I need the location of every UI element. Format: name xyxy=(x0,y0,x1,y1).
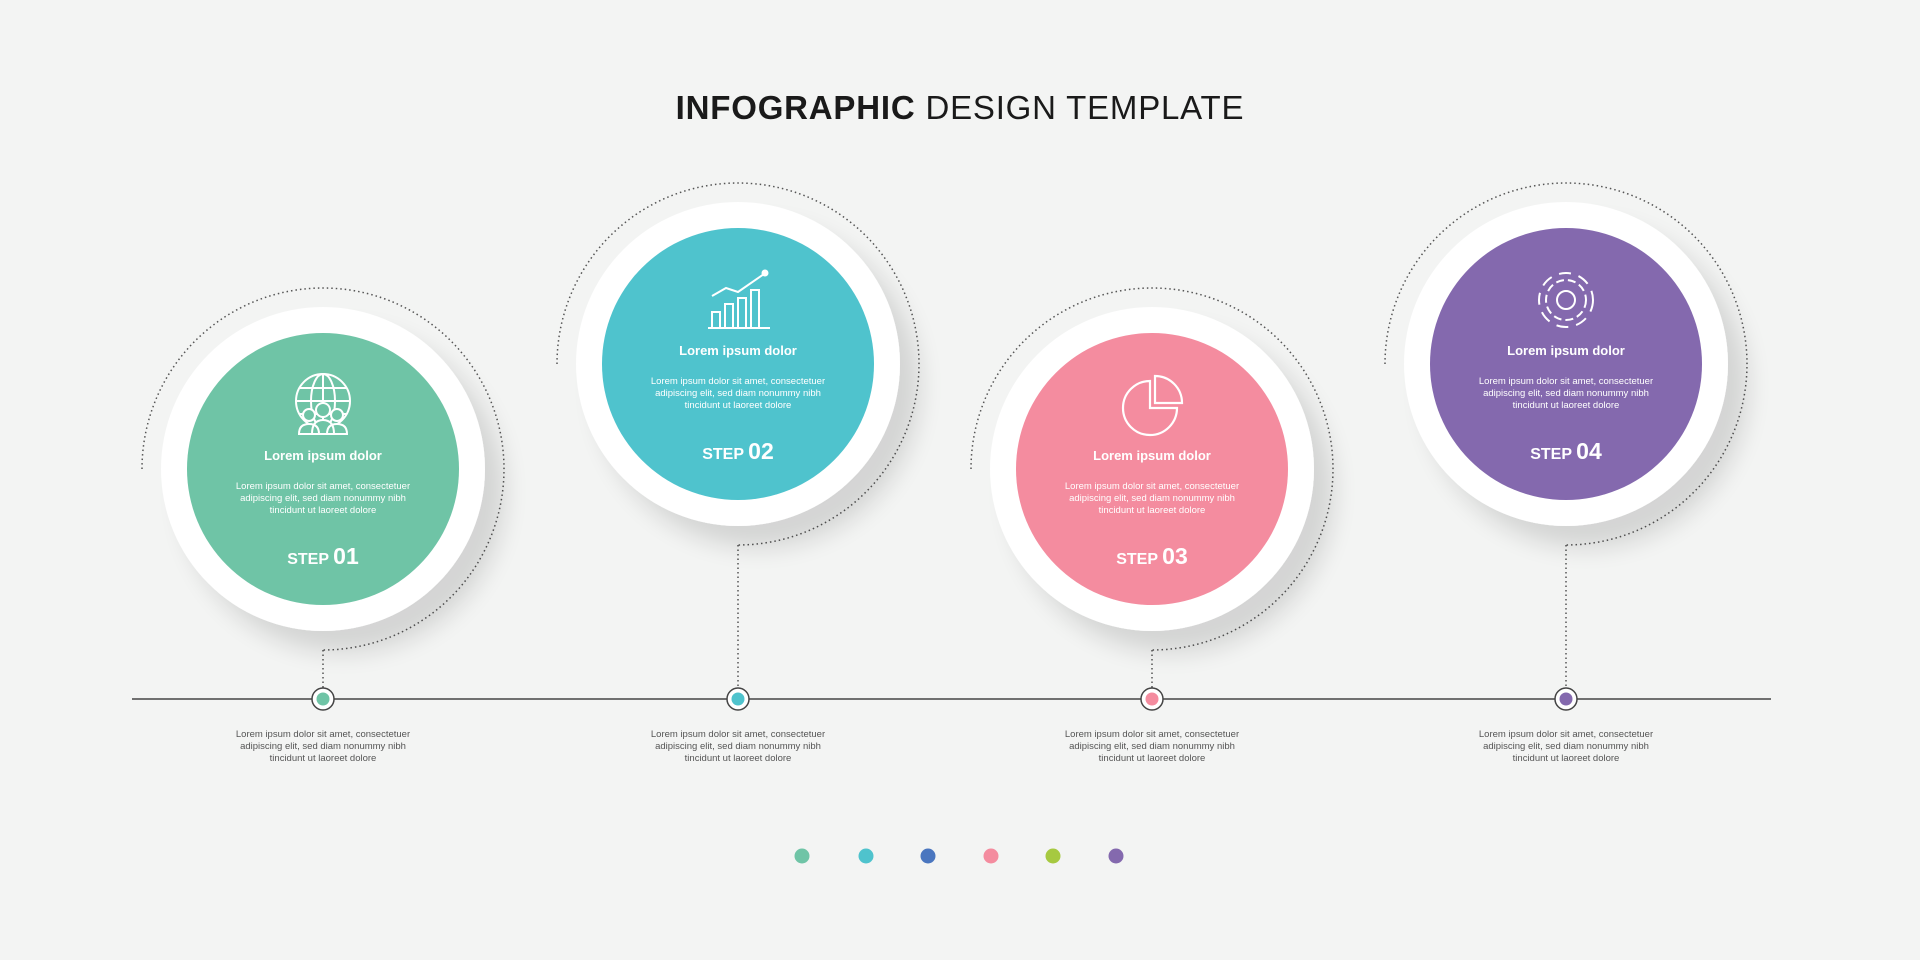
step 02 xyxy=(557,183,919,764)
step 04: tincidunt ut laoreet dolore xyxy=(1513,753,1619,764)
step 04 xyxy=(1385,183,1747,764)
step 01: adipiscing elit, sed diam nonummy nibh xyxy=(240,741,406,752)
icon: gear xyxy=(1539,273,1593,327)
step 03: tincidunt ut laoreet dolore xyxy=(1099,753,1205,764)
icon: bar chart xyxy=(708,270,770,328)
step 02: tincidunt ut laoreet dolore xyxy=(685,400,791,411)
step 04: Lorem ipsum dolor sit amet, consectetuer xyxy=(1479,376,1653,387)
step 04: tincidunt ut laoreet dolore xyxy=(1513,400,1619,411)
step 03 xyxy=(971,288,1333,764)
step 03: STEP 03 xyxy=(1116,543,1188,569)
step 02: adipiscing elit, sed diam nonummy nibh xyxy=(655,741,821,752)
step 02: Lorem ipsum dolor sit amet, consectetuer xyxy=(651,376,825,387)
step 01: tincidunt ut laoreet dolore xyxy=(270,505,376,516)
step 03: Lorem ipsum dolor sit amet, consectetuer xyxy=(1065,729,1239,740)
step 04: adipiscing elit, sed diam nonummy nibh xyxy=(1483,741,1649,752)
color palette dots xyxy=(794,848,1124,864)
step 02: Lorem ipsum dolor xyxy=(679,343,797,358)
timeline xyxy=(132,698,1771,700)
step 03: adipiscing elit, sed diam nonummy nibh xyxy=(1069,493,1235,504)
icon: pie chart xyxy=(1123,376,1182,435)
step 03: tincidunt ut laoreet dolore xyxy=(1099,505,1205,516)
step 02: STEP 02 xyxy=(702,438,774,464)
step 03: Lorem ipsum dolor sit amet, consectetuer xyxy=(1065,481,1239,492)
step 01: adipiscing elit, sed diam nonummy nibh xyxy=(240,493,406,504)
step 01: Lorem ipsum dolor xyxy=(264,448,382,463)
step 02: Lorem ipsum dolor sit amet, consectetuer xyxy=(651,729,825,740)
step 01: tincidunt ut laoreet dolore xyxy=(270,753,376,764)
step 01: Lorem ipsum dolor sit amet, consectetuer xyxy=(236,481,410,492)
step 04: Lorem ipsum dolor xyxy=(1507,343,1625,358)
step 02: tincidunt ut laoreet dolore xyxy=(685,753,791,764)
title: INFOGRAPHIC DESIGN TEMPLATE xyxy=(676,89,1244,126)
step 01 xyxy=(142,288,504,764)
step 04: STEP 04 xyxy=(1530,438,1602,464)
step 04: Lorem ipsum dolor sit amet, consectetuer xyxy=(1479,729,1653,740)
step 03: adipiscing elit, sed diam nonummy nibh xyxy=(1069,741,1235,752)
step 03: Lorem ipsum dolor xyxy=(1093,448,1211,463)
step 02: adipiscing elit, sed diam nonummy nibh xyxy=(655,388,821,399)
step 04: adipiscing elit, sed diam nonummy nibh xyxy=(1483,388,1649,399)
step 01: Lorem ipsum dolor sit amet, consectetuer xyxy=(236,729,410,740)
step 01: STEP 01 xyxy=(287,543,359,569)
icon: globe people xyxy=(296,374,350,434)
